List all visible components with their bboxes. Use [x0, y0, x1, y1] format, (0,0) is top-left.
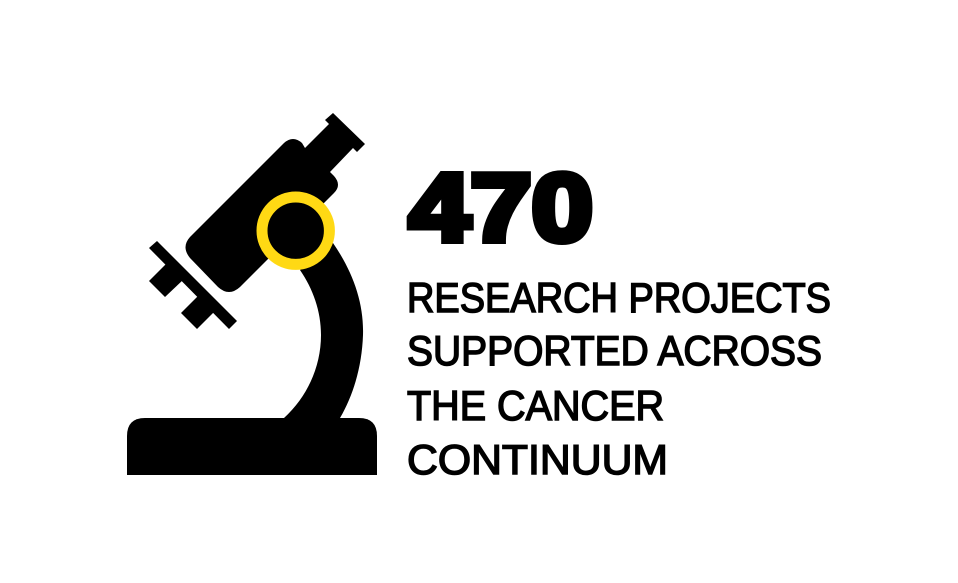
- icon: yellow focus ring: [262, 197, 329, 264]
- headline number: 470: [409, 154, 593, 262]
- line 2: SUPPORTED ACROSS: [407, 327, 822, 374]
- icon: microscope: [127, 113, 377, 475]
- line 1: RESEARCH PROJECTS: [407, 274, 831, 321]
- microscope tube: [186, 113, 365, 292]
- microscope arm: [280, 243, 363, 422]
- line 4: CONTINUUM: [407, 436, 668, 483]
- microscope stage: [149, 241, 237, 329]
- microscope base: [127, 418, 377, 475]
- line 3: THE CANCER: [407, 382, 664, 429]
- description text: [407, 274, 831, 483]
